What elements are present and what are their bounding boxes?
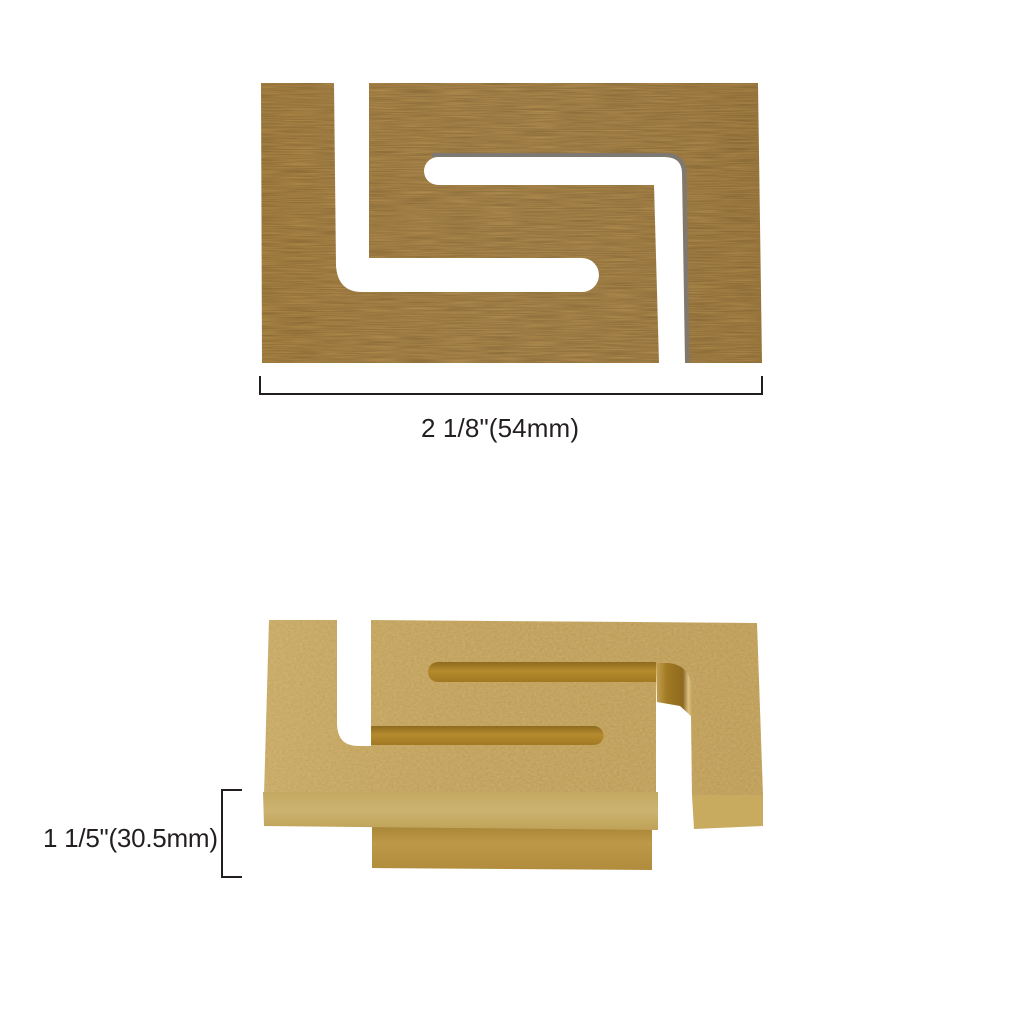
top view: brushed brass plate <box>255 78 767 368</box>
angled view: solid brass handle <box>260 615 770 870</box>
width dimension bracket <box>260 376 762 394</box>
depth label: 1 1/5"(30.5mm) <box>43 823 218 853</box>
front face <box>263 792 658 830</box>
width label: 2 1/8"(54mm) <box>421 413 579 443</box>
plate cut edge: grey inner wall <box>432 155 688 363</box>
lower base block <box>372 826 652 870</box>
top face of handle <box>260 615 770 800</box>
lower groove <box>371 726 604 745</box>
right arm front face <box>692 795 763 829</box>
upper groove <box>428 662 656 682</box>
inner curved wall <box>656 663 692 717</box>
depth dimension bracket <box>222 790 242 877</box>
